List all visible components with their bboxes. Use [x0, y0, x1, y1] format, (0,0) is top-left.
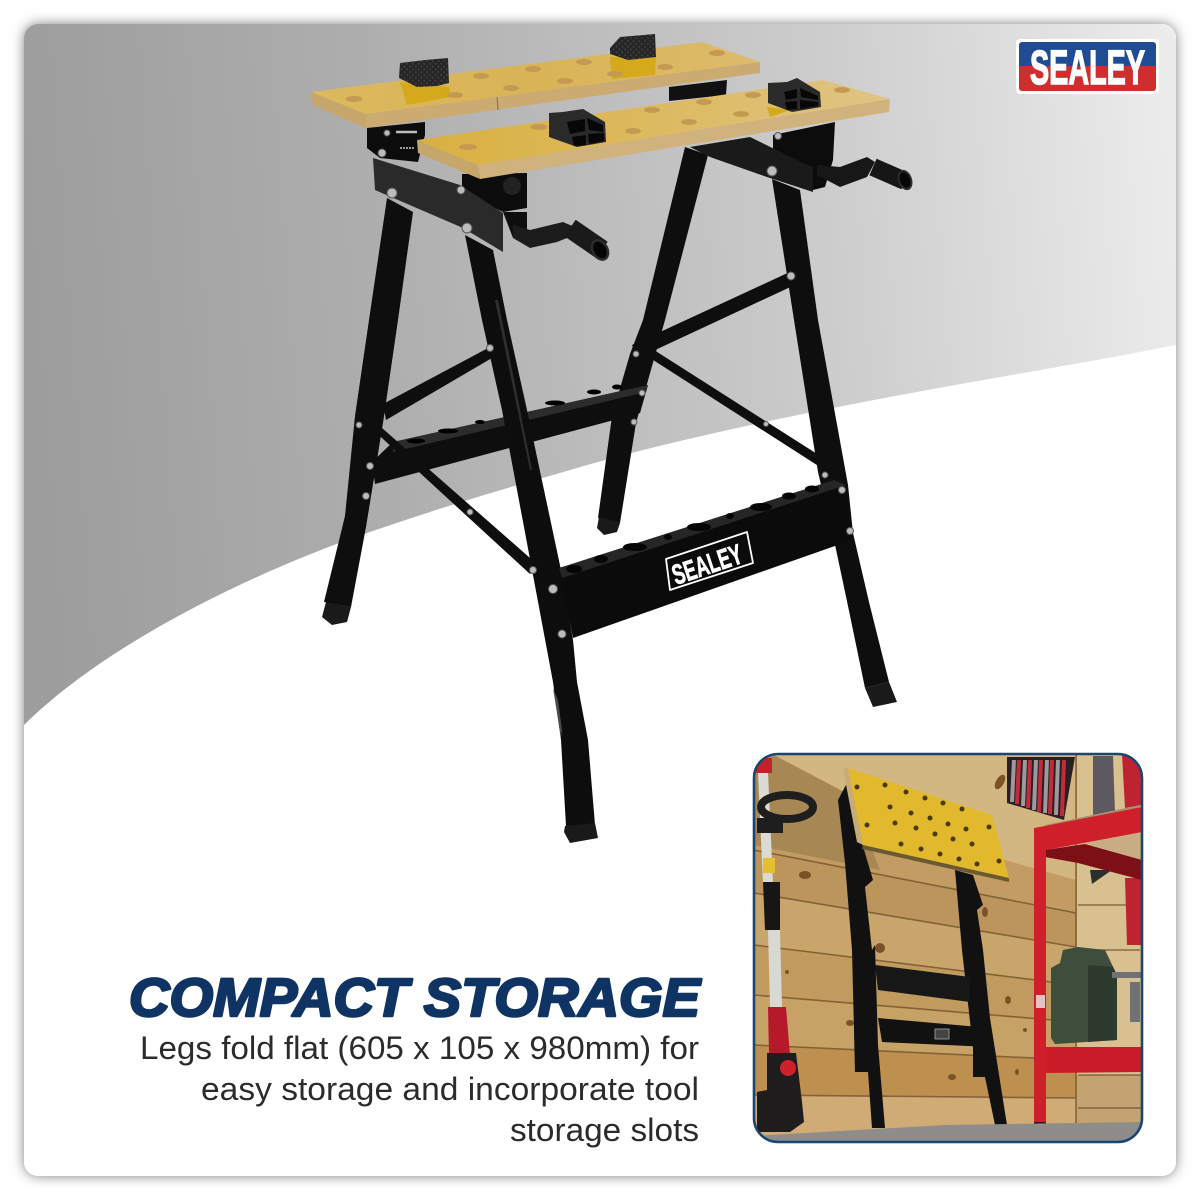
lower right brace	[650, 350, 825, 467]
saw on wall	[1093, 756, 1115, 815]
right clamp bracket	[773, 122, 835, 190]
tool roll	[1007, 757, 1075, 820]
near left leg	[465, 235, 595, 826]
shelving unit	[1034, 805, 1142, 1126]
front board vise jaws	[549, 78, 821, 147]
workbench product image	[311, 34, 915, 843]
rubber feet	[322, 517, 897, 843]
photo border	[754, 754, 1142, 1142]
small wall sign	[1090, 870, 1112, 884]
description text: easy storage and incorporate tool	[201, 1071, 699, 1107]
red panels on wall	[1122, 754, 1142, 945]
rear board	[311, 42, 760, 128]
left crank handle	[503, 212, 613, 264]
rear board vise jaws	[399, 34, 656, 87]
back legs and braces	[324, 147, 825, 607]
garden trimmer	[754, 758, 813, 1132]
near right leg	[772, 179, 889, 688]
timber wall	[754, 754, 1142, 1142]
description text	[140, 1030, 699, 1148]
heading: COMPACT STORAGE	[129, 968, 702, 1028]
logo: SEALEY	[1016, 39, 1159, 95]
bolts	[356, 130, 854, 638]
description text: storage slots	[510, 1112, 699, 1148]
front board	[417, 80, 890, 179]
rear crossbar with tool slots	[372, 384, 648, 484]
right crank handle	[817, 157, 915, 192]
long lower left brace	[358, 414, 538, 574]
jerry can	[1051, 947, 1117, 1044]
upper left brace	[383, 347, 492, 420]
upper right brace	[632, 270, 799, 358]
floor	[754, 1122, 1142, 1142]
rear board support bracket	[669, 80, 727, 101]
right end plate	[690, 137, 813, 192]
left clamp brackets	[367, 122, 527, 212]
inset photo: bench folded against wall	[754, 754, 1142, 1142]
left end plate	[373, 158, 503, 252]
SEALEY badge on crossbar: SEALEY	[668, 538, 746, 591]
rear right leg	[598, 147, 708, 523]
folded yellow board	[843, 768, 1009, 882]
near crossbar with tool slots and badge	[559, 480, 852, 638]
metal bracket behind shelf	[1112, 972, 1142, 1022]
folded bench frame	[838, 783, 1007, 1128]
description text: Legs fold flat (605 x 105 x 980mm) for	[140, 1030, 699, 1066]
rear left leg	[324, 198, 413, 607]
SEALEY badge on crossbar	[666, 532, 753, 591]
